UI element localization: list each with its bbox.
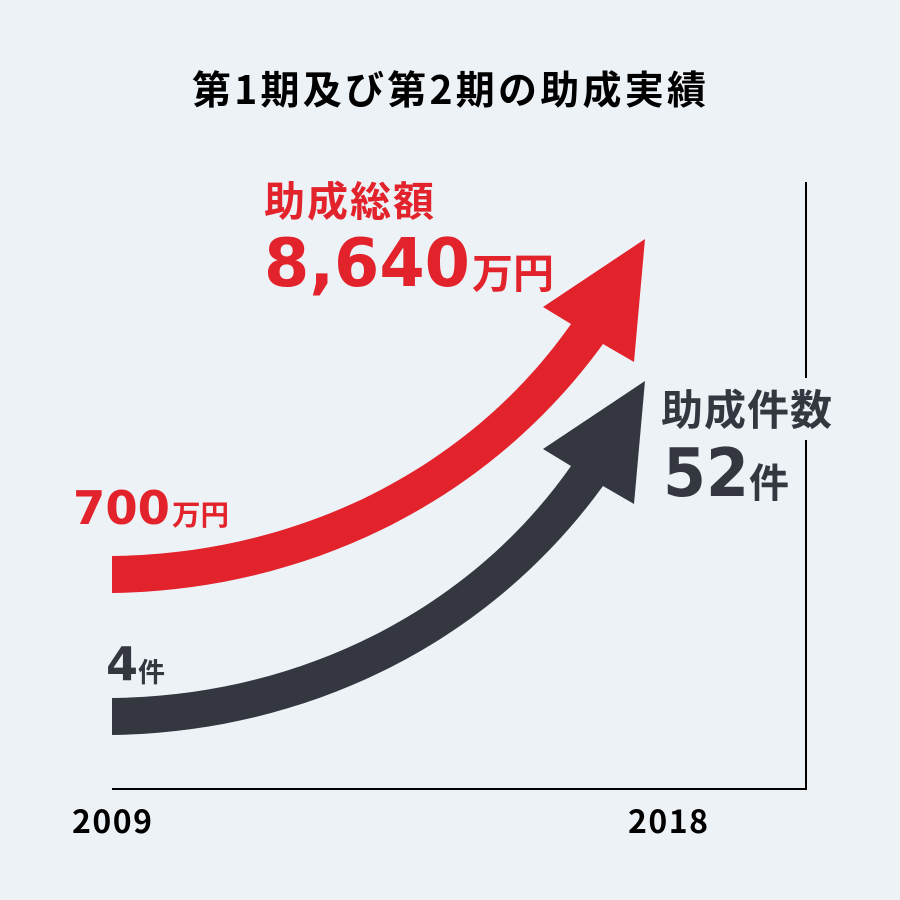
label: grant total value: 8,640 xyxy=(264,224,470,302)
label: year 2018: 2018 xyxy=(628,797,708,843)
label: 2009 grant amount: 700 xyxy=(73,481,170,535)
arrow: grant count (dark) xyxy=(112,381,645,735)
title: 第1期及び第2期の助成実績 xyxy=(192,60,706,116)
label: year 2009: 2009 xyxy=(72,797,152,843)
label: 2009 grant count xyxy=(106,637,165,691)
label: grant count value: 52 xyxy=(663,434,749,512)
label: 2009 grant count: 件 xyxy=(138,651,165,690)
label: 2009 grant count: 4 xyxy=(106,637,138,691)
label: grant total value: 万円 xyxy=(472,240,554,300)
label: grant count heading: 助成件数 xyxy=(661,377,832,438)
label: grant count value: 件 xyxy=(749,451,789,509)
arrow: grant total (red) xyxy=(112,239,645,593)
label: 2009 grant amount xyxy=(73,481,229,535)
chart axes xyxy=(112,182,807,790)
label: 2009 grant amount: 万円 xyxy=(172,493,229,534)
label: grant total heading: 助成総額 xyxy=(264,168,434,228)
